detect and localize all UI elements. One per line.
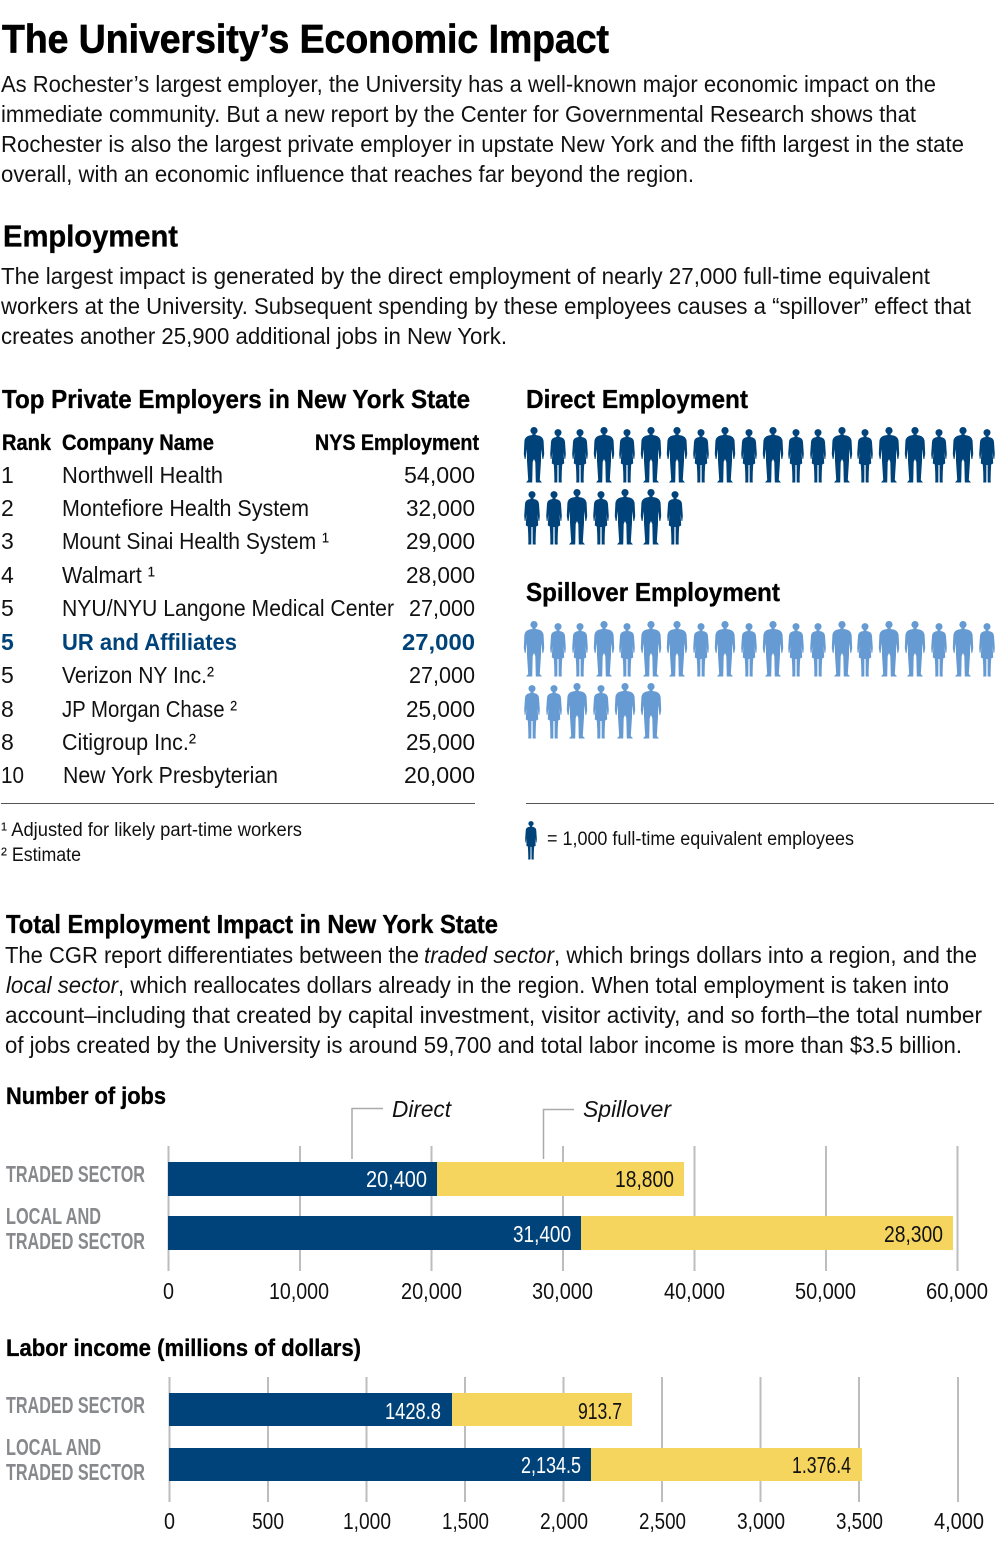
row: local and traded sector: 1.376.4 (792, 1452, 851, 1478)
callout: spillover: Spillover (583, 1096, 672, 1122)
row: local and traded sector (6, 1434, 862, 1485)
table header row (2, 430, 480, 455)
intro paragraph: overall, with an economic influence that reaches far beyond the region. (1, 161, 694, 187)
table rows: 54,000 (404, 462, 475, 488)
table rows: Walmart ¹ (62, 562, 155, 588)
row: traded sector: 20,400 (366, 1166, 427, 1192)
heading: total employment impact: Total Employment Impact in New York State (6, 909, 498, 939)
table rows: 29,000 (406, 528, 475, 554)
table rows: 8 (1, 696, 14, 722)
table rows: 28,000 (406, 562, 475, 588)
table heading: Top Private Employers in New York State (2, 384, 470, 414)
x axis labels: 3,500 (836, 1508, 883, 1534)
intro paragraph: As Rochester’s largest employer, the University has a well-known major economic impact on the (1, 71, 936, 97)
table rows: Montefiore Health System (62, 495, 309, 521)
x axis labels: 30,000 (532, 1278, 593, 1304)
total employment paragraph: traded sector (424, 942, 555, 968)
table rows: 20,000 (404, 762, 475, 788)
row: local and traded sector: 28,300 (884, 1221, 943, 1247)
x axis labels (163, 1278, 988, 1304)
row: local and traded sector: LOCAL AND (6, 1434, 101, 1460)
total employment paragraph (5, 942, 982, 1058)
total employment paragraph: of jobs created by the University is around 59,700 and total labor income is more than $3.5 billion. (5, 1032, 962, 1058)
total employment paragraph: , which reallocates dollars already in the region. When total employment is taken into (118, 972, 949, 998)
x axis labels: 500 (252, 1508, 284, 1534)
table rows: 4 (1, 562, 14, 588)
row: traded sector (6, 1161, 684, 1196)
table rows: 3 (1, 528, 14, 554)
table rows: 25,000 (406, 729, 475, 755)
icon: legend person (525, 821, 537, 860)
row: local and traded sector: TRADED SECTOR (6, 1228, 145, 1254)
footnotes: ² Estimate (1, 845, 81, 866)
panel: top private employers table (1, 384, 480, 866)
total employment paragraph: , which brings dollars into a region, and the (554, 942, 977, 968)
table rows: 27,000 (402, 629, 475, 655)
table rows: 2 (1, 495, 14, 521)
row: local and traded sector: LOCAL AND (6, 1203, 101, 1229)
row: local and traded sector: 2,134.5 (521, 1452, 581, 1478)
footnotes (1, 820, 302, 866)
table rows: 5 (1, 629, 14, 655)
x axis labels: 1,000 (343, 1508, 391, 1534)
table header row: NYS Employment (315, 430, 480, 455)
chart: labor income (6, 1335, 984, 1534)
table rows: New York Presbyterian (63, 762, 278, 788)
table rows: Northwell Health (62, 462, 223, 488)
x axis labels: 40,000 (664, 1278, 725, 1304)
heading: Employment: Employment (3, 218, 178, 254)
row: local and traded sector: 31,400 (513, 1221, 571, 1247)
intro paragraph (1, 71, 964, 187)
heading: direct employment: Direct Employment (526, 384, 748, 414)
table header row: Company Name (62, 430, 214, 455)
x axis labels: 2,000 (540, 1508, 588, 1534)
x axis labels: 2,500 (639, 1508, 686, 1534)
title: The University’s Economic Impact (2, 18, 609, 62)
x axis labels (164, 1508, 984, 1534)
pictogram: spillover employment people (524, 621, 995, 738)
employment paragraph: creates another 25,900 additional jobs in New York. (1, 323, 507, 349)
table rows: 8 (1, 729, 14, 755)
table rows: JP Morgan Chase ² (62, 696, 237, 722)
row: traded sector: 913.7 (578, 1398, 622, 1424)
pictogram: direct employment people (524, 427, 995, 544)
table rows: NYU/NYU Langone Medical Center (62, 595, 394, 621)
table rows: Citigroup Inc.² (62, 729, 196, 755)
intro paragraph: immediate community. But a new report by the Center for Governmental Research shows that (1, 101, 917, 127)
row: traded sector: 1428.8 (385, 1398, 441, 1424)
callout: direct: Direct (392, 1096, 453, 1122)
x axis labels: 1,500 (442, 1508, 489, 1534)
callout: spillover (544, 1096, 672, 1159)
employment paragraph: The largest impact is generated by the direct employment of nearly 27,000 full-time equivalent (1, 263, 931, 289)
table rows: 1 (1, 462, 14, 488)
employment paragraph (0, 263, 972, 349)
x axis labels: 0 (164, 1508, 175, 1534)
x axis labels: 50,000 (795, 1278, 856, 1304)
total employment paragraph: The CGR report differentiates between the (5, 942, 419, 968)
table rows (1, 462, 475, 788)
employment paragraph: workers at the University. Subsequent spending by these employees causes a “spillover” effect that (0, 293, 972, 319)
table rows: 10 (1, 762, 24, 788)
table rows: 5 (1, 595, 14, 621)
x axis labels: 4,000 (934, 1508, 984, 1534)
callout: direct (352, 1096, 453, 1159)
chart heading: Labor income (millions of dollars) (6, 1335, 361, 1362)
row: traded sector: TRADED SECTOR (6, 1392, 145, 1418)
row: local and traded sector (6, 1203, 953, 1254)
x axis labels: 10,000 (269, 1278, 329, 1304)
legend: one person equals 1,000 employees: = 1,000 full-time equivalent employees (547, 829, 854, 850)
table rows: 5 (1, 662, 14, 688)
footnotes: ¹ Adjusted for likely part-time workers (1, 820, 302, 841)
total employment paragraph: local sector (6, 972, 119, 998)
table rows: UR and Affiliates (62, 629, 237, 655)
x axis labels: 60,000 (926, 1278, 988, 1304)
x axis labels: 20,000 (401, 1278, 462, 1304)
row: local and traded sector: TRADED SECTOR (6, 1459, 145, 1485)
table rows: Mount Sinai Health System ¹ (62, 528, 329, 554)
chart heading: Number of jobs (6, 1083, 166, 1110)
table header row: Rank (2, 430, 52, 455)
x axis labels: 0 (163, 1278, 174, 1304)
x axis labels: 3,000 (737, 1508, 785, 1534)
table rows: Verizon NY Inc.² (62, 662, 214, 688)
row: traded sector: TRADED SECTOR (6, 1161, 145, 1187)
chart: number of jobs (6, 1083, 988, 1304)
table rows: 25,000 (406, 696, 475, 722)
table rows: 27,000 (409, 662, 475, 688)
total employment paragraph: account–including that created by capital investment, visitor activity, and so forth–the total number (5, 1002, 982, 1028)
table rows: 27,000 (409, 595, 475, 621)
heading: spillover employment: Spillover Employment (526, 577, 780, 607)
table rows: 32,000 (406, 495, 475, 521)
legend: one person equals 1,000 employees (525, 821, 854, 860)
intro paragraph: Rochester is also the largest private employer in upstate New York and the fifth largest in the state (1, 131, 964, 157)
row: traded sector (6, 1392, 632, 1426)
row: traded sector: 18,800 (615, 1166, 674, 1192)
